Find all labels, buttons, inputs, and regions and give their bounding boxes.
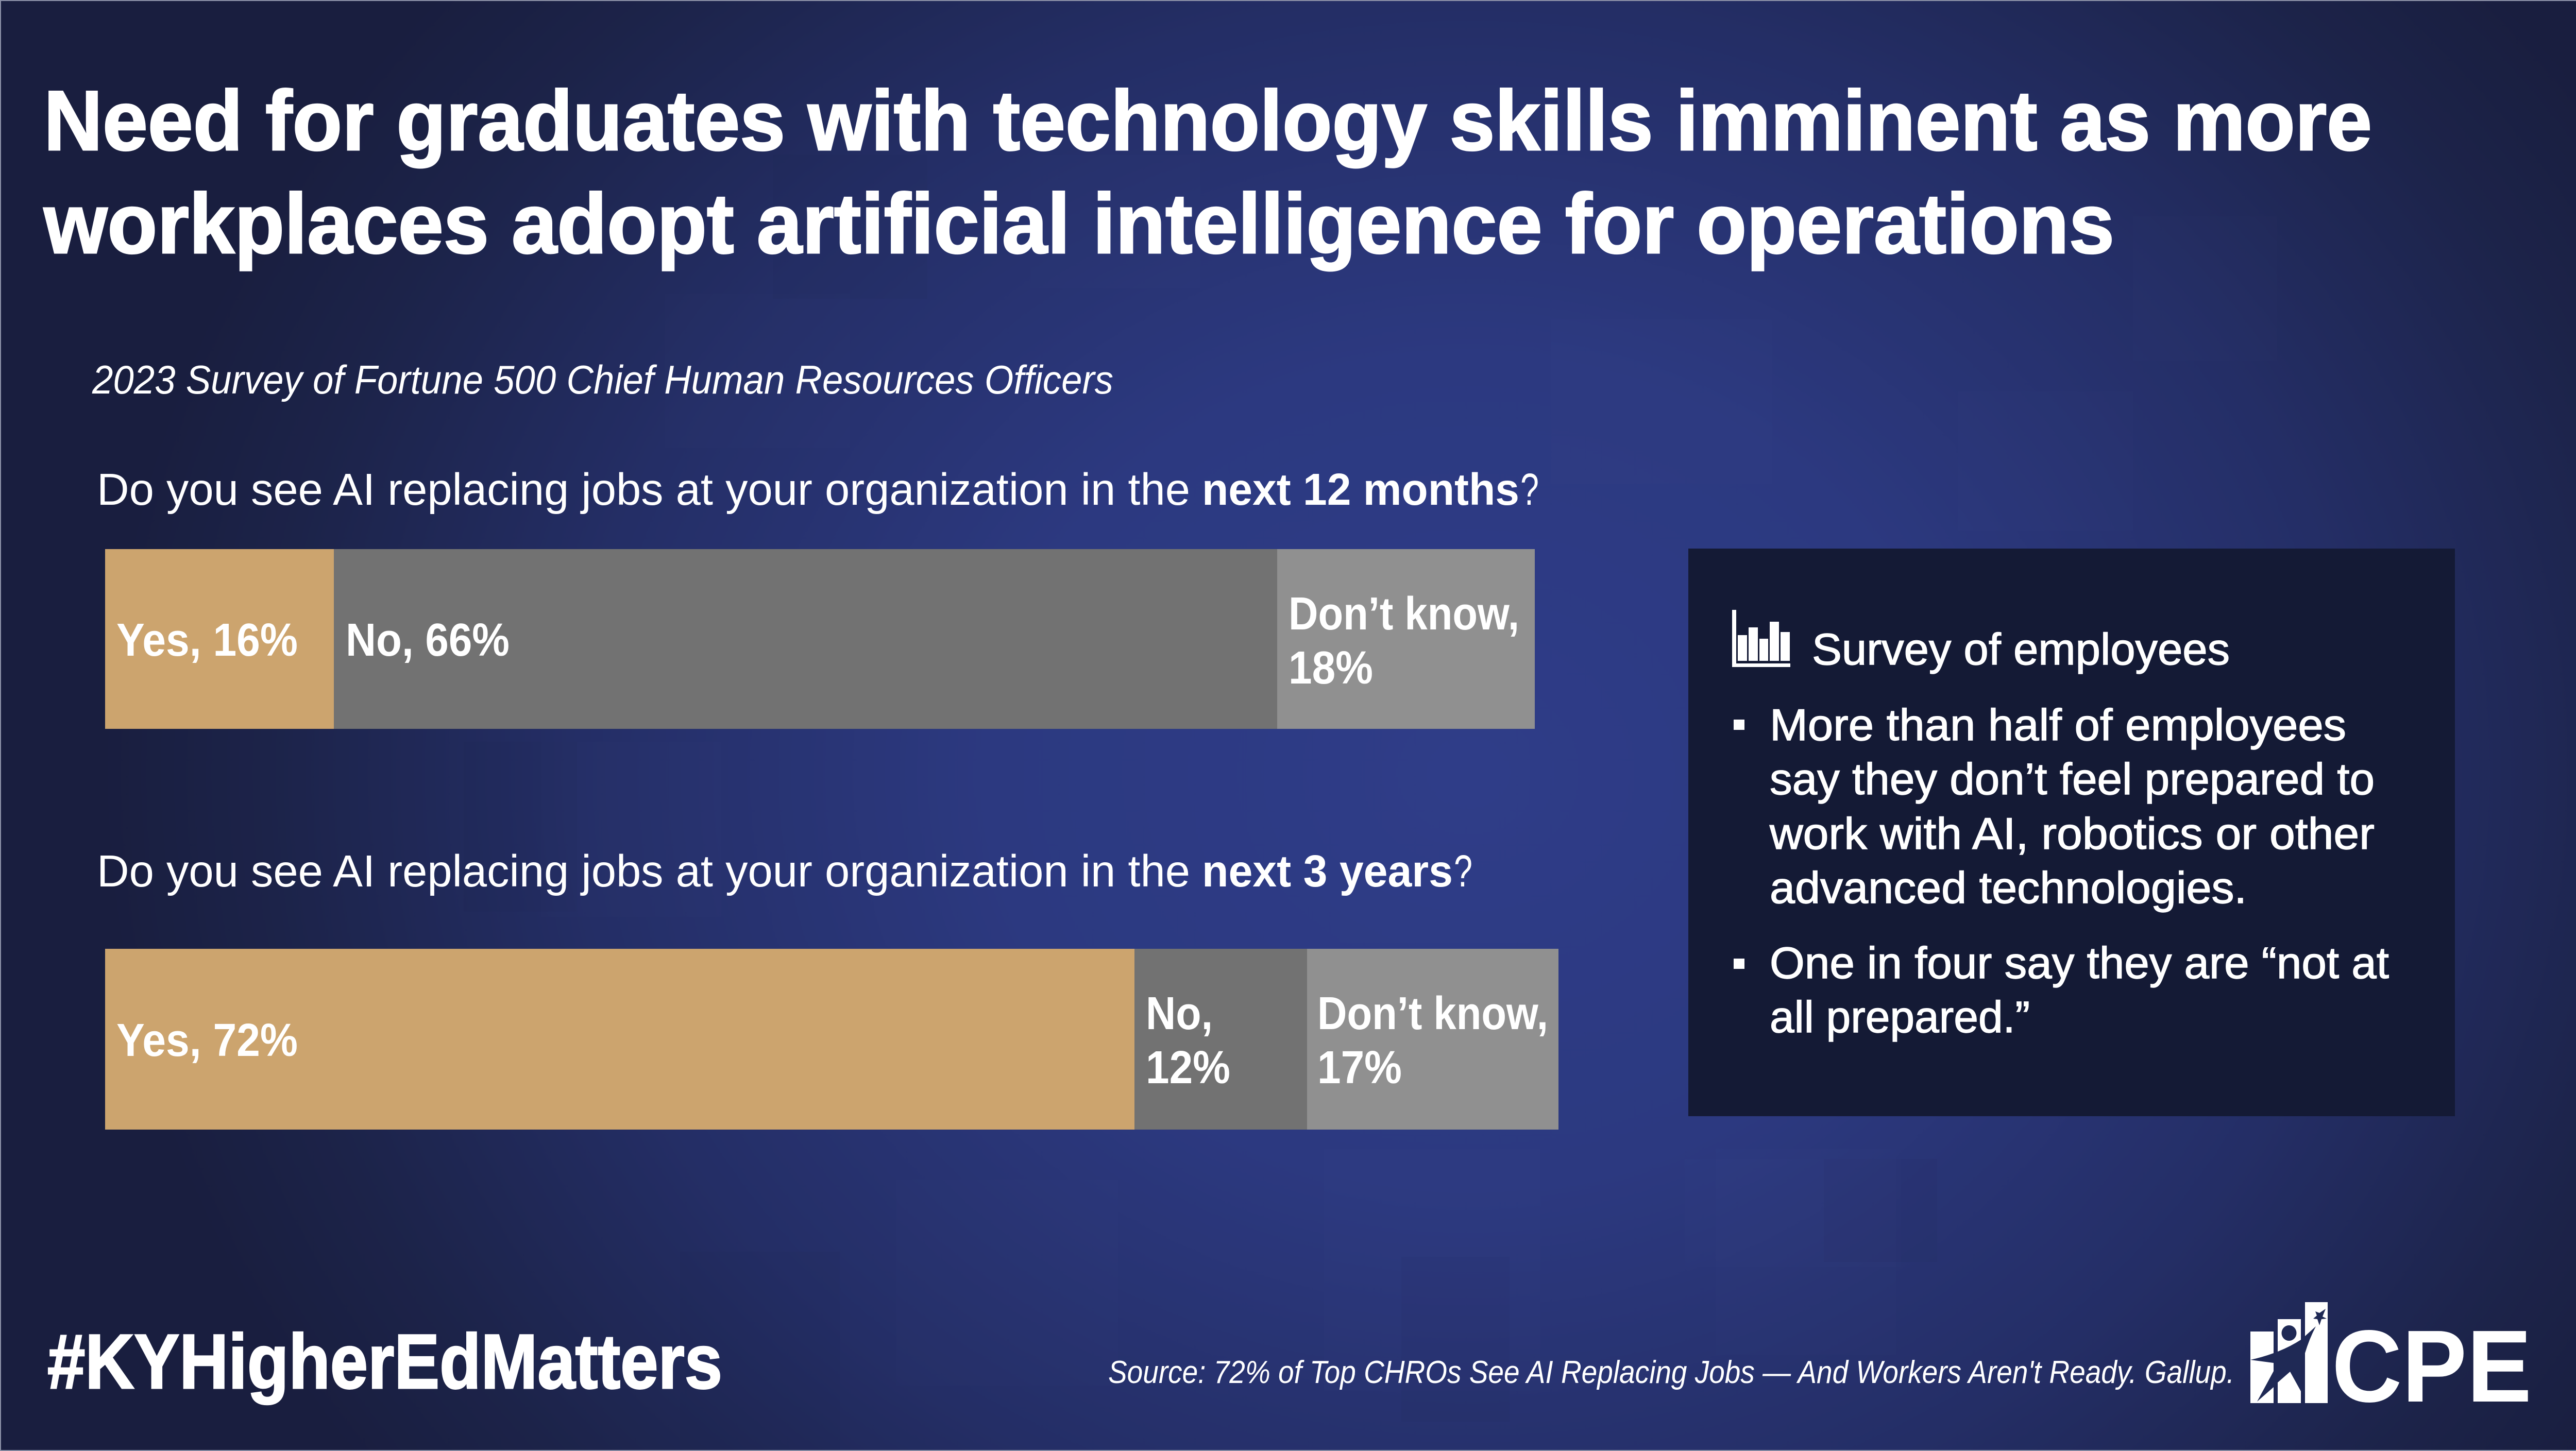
segment: no 66%	[334, 549, 1277, 729]
segment: yes 72%: Yes, 72%	[116, 1015, 298, 1066]
title	[43, 73, 2372, 271]
survey subtitle: 2023 Survey of Fortune 500 Chief Human Resources Officers	[92, 357, 1113, 402]
segment: don't know 18%: Don’t know,	[1289, 588, 1519, 640]
segment: yes 72%	[105, 949, 1134, 1130]
segment: don't know 17%: 17%	[1317, 1042, 1402, 1094]
question: next 3 years: ?	[1454, 846, 1472, 896]
segment: don't know 17%	[1307, 949, 1558, 1130]
question: next 12 months: ?	[1520, 465, 1539, 515]
segment: no 12%: 12%	[1146, 1042, 1230, 1094]
logo: CPE	[2250, 1302, 2532, 1424]
segment: don't know 18%: 18%	[1289, 642, 1373, 694]
bullet 1	[1734, 701, 2375, 913]
title: workplaces adopt artificial intelligence for operations	[43, 176, 2114, 271]
bullet 1: More than half of employees	[1770, 701, 2346, 750]
bullet 2: all prepared.”	[1770, 993, 2030, 1042]
title: Need for graduates with technology skills imminent as more	[44, 73, 2372, 168]
bullet 2: One in four say they are “not at	[1770, 938, 2389, 988]
question: next 12 months: next 12 months	[1202, 465, 1519, 515]
stacked bar: next 12 months	[105, 549, 1535, 729]
logo mark	[2250, 1302, 2328, 1403]
stacked bar: next 3 years	[105, 949, 1558, 1130]
bullet 1: say they don’t feel prepared to	[1770, 755, 2375, 804]
segment: no 66%: No, 66%	[346, 614, 510, 666]
segment: yes 16%	[105, 549, 334, 729]
logo wordmark: CPE	[2332, 1309, 2532, 1424]
segment: don't know 17%: Don’t know,	[1317, 988, 1548, 1039]
segment: no 12%	[1134, 949, 1307, 1130]
source note: Source: 72% of Top CHROs See AI Replacing Jobs — And Workers Aren't Ready. Gallup.	[1108, 1355, 2234, 1390]
icon: bar chart	[1732, 610, 1790, 667]
hashtag: #KYHigherEdMatters	[47, 1318, 722, 1405]
segment: yes 16%: Yes, 16%	[116, 614, 298, 666]
segment: don't know 18%	[1277, 549, 1535, 729]
question: next 3 years: next 3 years	[1202, 846, 1453, 896]
panel heading: Survey of employees	[1812, 625, 2230, 674]
bullet 2	[1734, 938, 2389, 1042]
segment: no 12%: No,	[1146, 988, 1213, 1039]
panel: survey of employees	[1688, 549, 2455, 1116]
question: next 12 months: Do you see AI replacing jobs at your organization in the	[97, 465, 1190, 515]
bullet 1: advanced technologies.	[1770, 863, 2247, 913]
question: next 3 years: Do you see AI replacing jobs at your organization in the	[97, 846, 1190, 896]
bullet 1: work with AI, robotics or other	[1769, 809, 2375, 859]
